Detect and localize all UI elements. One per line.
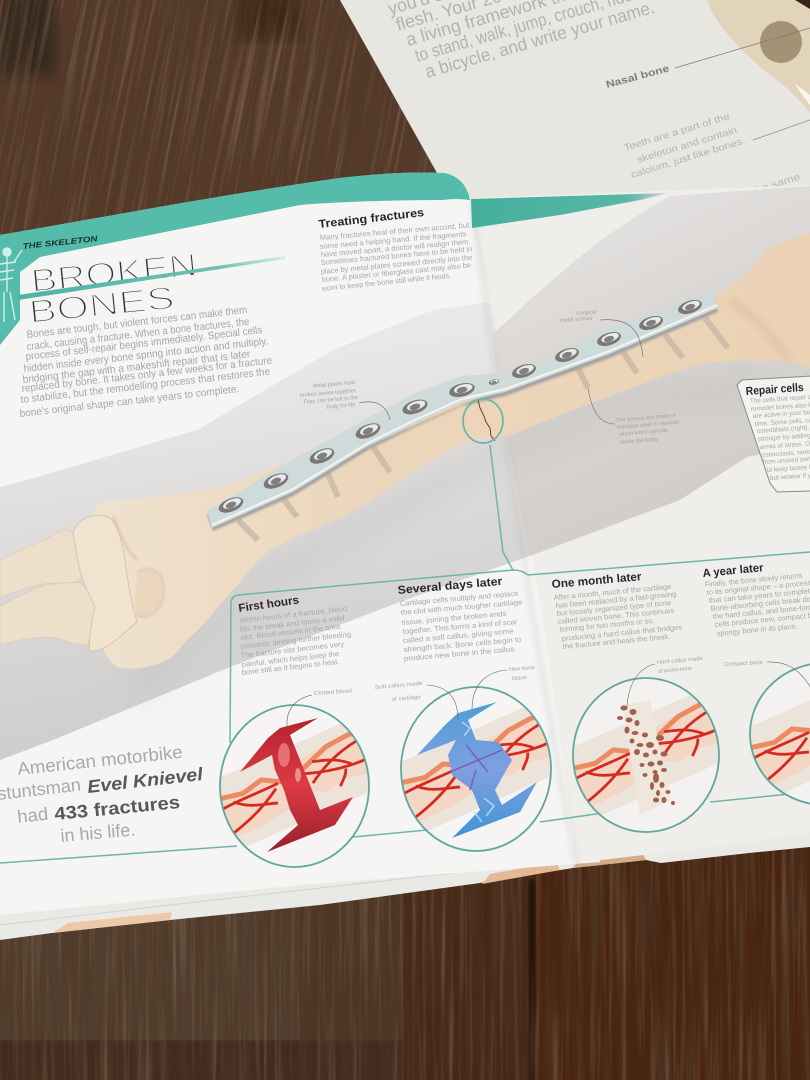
intro paragraph: [19, 304, 273, 420]
panel: treating fractures: have moved apart, a doctor will realign them.: [320, 237, 471, 259]
stage: first hours: constrict, limiting further bleeding.: [240, 629, 354, 651]
lower bones: [0, 530, 83, 598]
label: hard callus: of woven bone: [658, 666, 692, 675]
label: soft callus: Soft callus made: [375, 681, 423, 691]
callout: evel knievel fact: [0, 742, 205, 846]
panel: treating fractures: bone. A plaster or fiberglass cast may also be: [321, 260, 471, 284]
back page: skeleton introduction: [340, 0, 810, 205]
label: hard callus: Hard callus made: [657, 656, 703, 666]
stage: one month later: [552, 574, 720, 833]
stage: several days later: produce new bone in the callus.: [403, 644, 517, 663]
right page: [468, 185, 810, 863]
stage: several days later: Cartilage cells multiply and replace: [399, 589, 519, 608]
arm illustration: [0, 232, 810, 668]
callout: evel knievel fact: 433 fractures: [53, 792, 181, 824]
annotation: surgical screws: metal screws: [560, 316, 593, 324]
open book: [0, 173, 810, 940]
stage: a year later: to its original shape – a process: [706, 578, 810, 597]
panel: treating fractures: some need a helping hand. If the fragments: [319, 229, 467, 251]
panel: treating fractures: [318, 207, 473, 293]
title: BROKEN: [29, 246, 199, 299]
fracture detail ring: [463, 399, 503, 443]
title: BONES: [27, 279, 176, 330]
icon: skull: [707, 0, 810, 113]
label: clotted blood: Clotted blood: [314, 688, 352, 697]
label: teeth: the same: [751, 172, 802, 197]
grey illustration background: right: [492, 186, 810, 556]
annotation: metal plates: body for life.: [326, 402, 358, 411]
annotation: screw material: which won't corrode: [618, 428, 668, 438]
callout: evel knievel fact: had: [16, 804, 49, 827]
panel: repair cells: [737, 376, 810, 492]
grey illustration background: left: [0, 302, 535, 760]
intro paragraph: hidden inside every bone spring into action and multiply,: [23, 335, 269, 375]
diagram: soft callus: [400, 686, 552, 852]
stage: first hours: The fracture site becomes very: [240, 639, 345, 660]
stage: several days later: Several days later: [397, 576, 503, 597]
stage: a year later: spongy bone in its place.: [716, 621, 798, 638]
annotation: screw material: inside the body.: [620, 437, 659, 446]
label: teeth: calcium, just like bones.: [630, 136, 747, 181]
teal header band: right page: [471, 193, 668, 228]
stage: one month later: producing a hard callus that bridges: [561, 622, 683, 643]
frame connecting ring to stages: [0, 445, 810, 863]
stage: first hours: bone still as it begins to heal.: [241, 657, 340, 677]
stage: first hours: clot. Blood vessels in the area: [240, 622, 341, 642]
gutter shadow: [472, 205, 576, 865]
teal header band: left page: [0, 173, 470, 345]
intro paragraph: crack, causing a fracture. When a bone fractures, the: [26, 316, 250, 353]
stage: one month later: forming for two months or so,: [559, 616, 655, 634]
stage: several days later: called a soft callus, giving some: [402, 626, 514, 645]
stage: several days later: strength back. Bone cells begin to: [403, 635, 522, 654]
intro paragraph: bridging the gap with a makeshift repair that is later: [22, 348, 251, 386]
label: teeth: Teeth are a part of the: [623, 111, 731, 154]
callout: evel knievel fact: in his life.: [60, 820, 136, 846]
annotation: metal plates: broken bones together.: [300, 388, 358, 399]
page stack edges: [0, 820, 810, 940]
diagram: compact bone: [749, 664, 810, 804]
label: new bone tissue: New bone: [509, 665, 535, 673]
intro paragraph: replaced by bone. It takes only a few weeks for a fracture: [21, 355, 273, 395]
screw shafts: [238, 318, 728, 540]
intro paragraph: Bones are tough, but violent forces can make them: [26, 304, 248, 341]
elbow joint: [73, 516, 137, 651]
label: new bone tissue: tissue: [512, 675, 527, 682]
stage: first hours: Within hours of a fracture, blood: [239, 604, 348, 625]
stage: first hours: [219, 598, 370, 868]
wrist shading: [730, 300, 790, 360]
annotation: metal plates: Metal plates hold: [313, 380, 355, 390]
intro paragraph: bone's original shape can take years to complete.: [19, 383, 240, 420]
intro paragraph: to stabilize, but the remodelling process that restores the: [20, 366, 271, 406]
stage: one month later: the fracture and heals the break.: [562, 632, 671, 651]
annotation: screw material: The screws are made of: [616, 413, 676, 424]
label: soft callus: [375, 681, 458, 720]
label: hard callus: [627, 656, 703, 707]
stage: several days later: the clot with much tougher cartilage: [400, 597, 523, 617]
stage: first hours: fills the break and forms a solid: [239, 613, 345, 634]
label: compact bone: [724, 660, 810, 690]
stage: several days later: tissue, joining the broken ends: [401, 609, 507, 627]
label: nasal bone: [605, 28, 810, 91]
stage: one month later: After a month, much of the cartilage: [553, 582, 672, 602]
intro paragraph: process of self-repair begins immediately. Special cells: [25, 324, 263, 363]
stage: first hours: painful, which helps keep the: [241, 649, 340, 669]
label: teeth: skeleton and contain: [636, 125, 738, 166]
stage: a year later: Finally, the bone slowly returns: [704, 571, 803, 589]
stage: several days later: [375, 578, 552, 852]
stage: one month later: has been replaced by a fast-growing: [555, 589, 677, 610]
annotation: metal plates: They can be left in the: [303, 395, 358, 406]
annotation: screw material: [588, 388, 680, 446]
panel: treating fractures: Sometimes fractured bones have to be held in: [320, 244, 473, 267]
stage: a year later: A year later: [702, 562, 765, 580]
title: [18, 246, 285, 330]
panel: treating fractures: Treating fractures: [318, 207, 425, 231]
label: teeth: [623, 111, 810, 197]
stage: first hours: First hours: [238, 595, 300, 615]
stage: one month later: but loosely organized type of bone: [556, 598, 672, 618]
plate screws: [217, 297, 704, 516]
diagram: woven bone: [572, 677, 720, 833]
shadow under arm: [130, 385, 760, 690]
label: nasal bone: Nasal bone: [605, 63, 671, 91]
section label: THE SKELETON: [22, 234, 98, 251]
icon: skeleton thumbnail: [0, 248, 22, 322]
label: compact bone: Compact bone: [724, 660, 763, 668]
stage: several days later: together. This forms a kind of scar: [402, 617, 518, 636]
panel: treating fractures: Many fractures heal of their own accord, but: [319, 220, 470, 242]
label: new bone tissue: [472, 665, 535, 710]
left page: [0, 173, 600, 915]
callout: evel knievel fact: American motorbike: [16, 742, 184, 779]
annotation: screw material: stainless steel or titanium: [617, 420, 680, 431]
panel: treating fractures: place by metal plates screwed directly into the: [320, 253, 473, 276]
panel: treating fractures: worn to keep the bone still while it heals.: [320, 271, 452, 293]
forearm: [88, 232, 810, 668]
stage: a year later: [702, 562, 810, 808]
label: soft callus: of cartilage: [392, 694, 421, 703]
diagram: clotted blood: [219, 704, 370, 868]
metal plate: [207, 293, 718, 531]
stage: one month later: One month later: [551, 571, 642, 591]
panel: repair cells: Repair cells: [745, 382, 804, 398]
annotation: surgical screws: [560, 310, 643, 357]
callout: evel knievel fact: Evel Knievel: [86, 764, 205, 797]
stage: one month later: called woven bone. This continues: [557, 606, 675, 626]
annotation: metal plates: [300, 380, 390, 420]
label: clotted blood: [287, 688, 352, 726]
annotation: surgical screws: Surgical: [576, 310, 596, 317]
